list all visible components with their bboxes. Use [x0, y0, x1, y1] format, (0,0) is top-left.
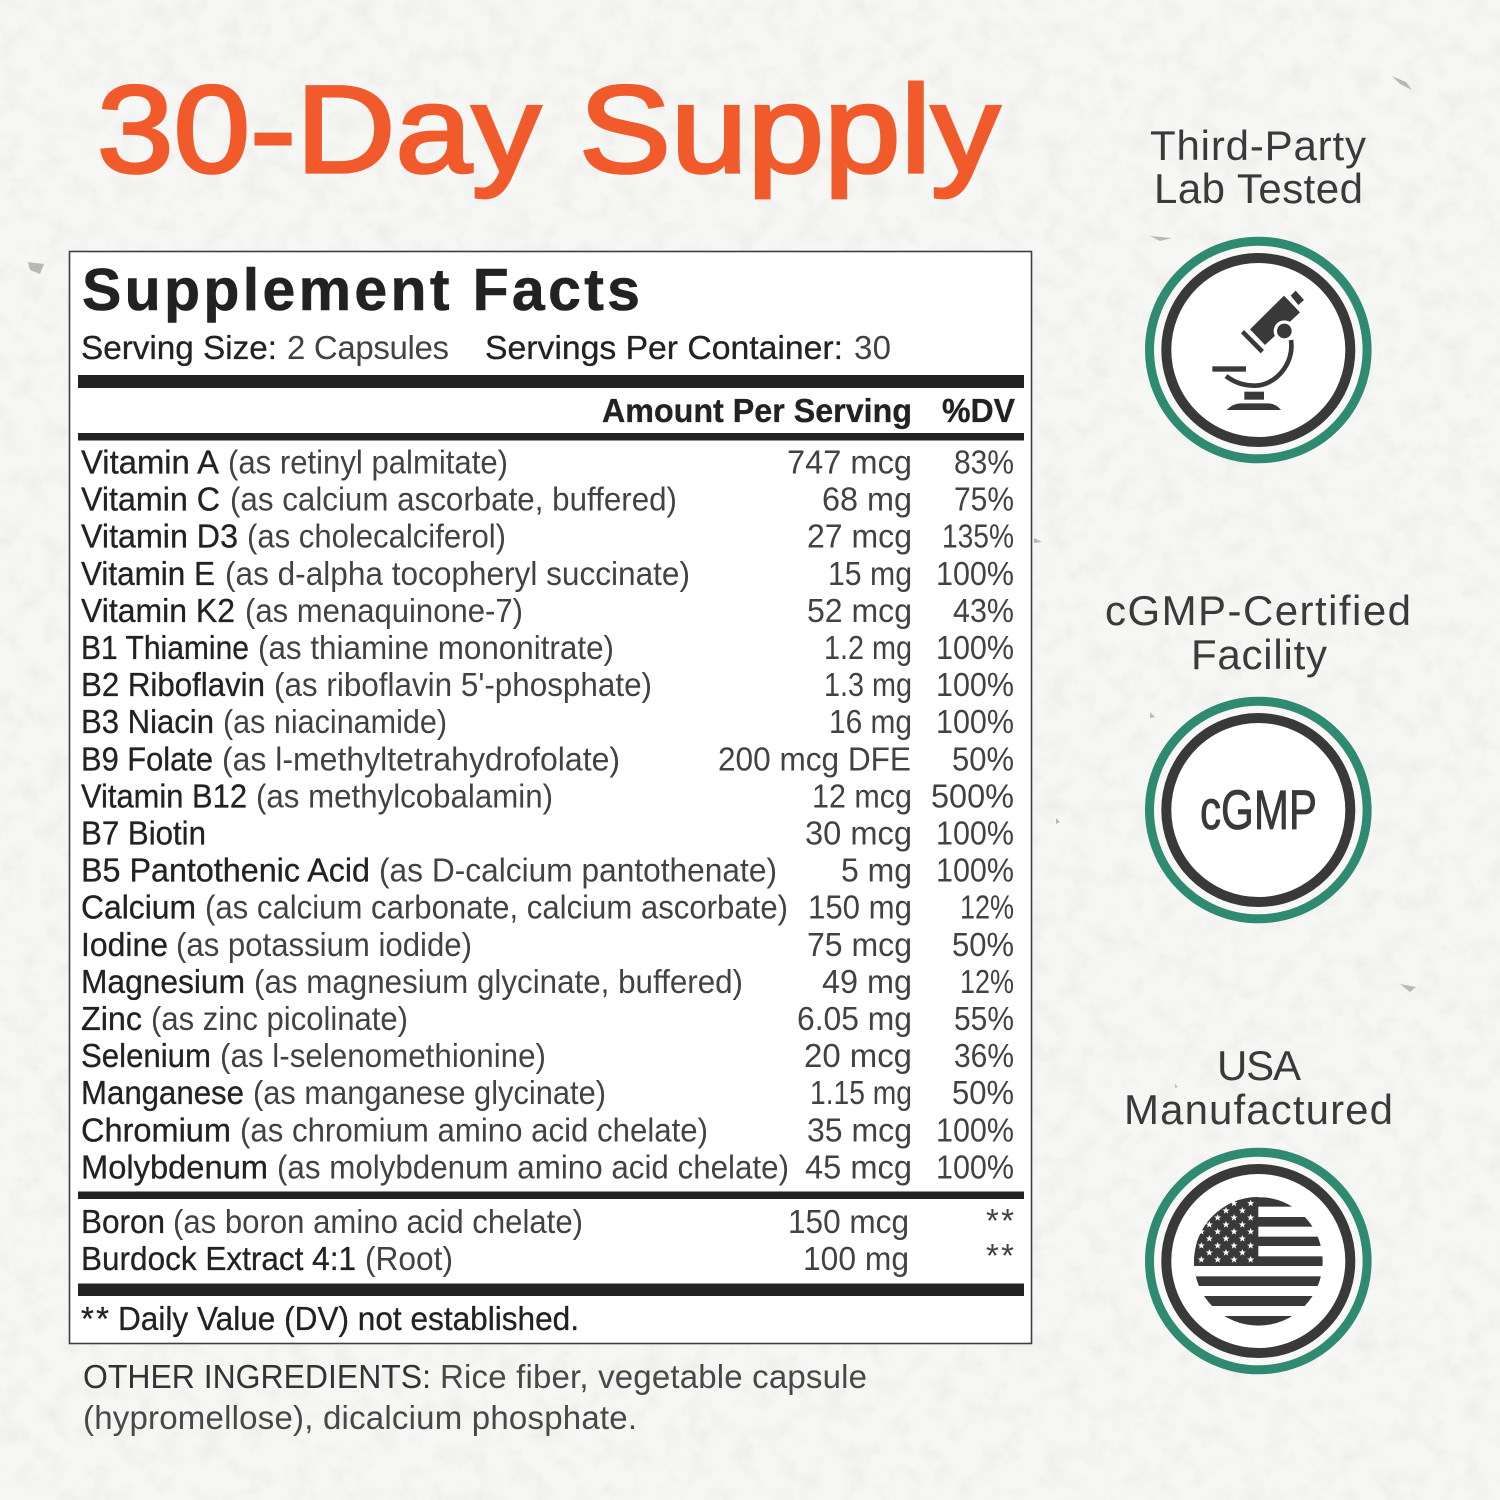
- row: Vitamin B12: Vitamin B12: [81, 777, 247, 814]
- row: Iodine: Iodine: [81, 926, 168, 963]
- serving information: Serving Size:: [81, 329, 277, 366]
- row: Boron: 150 mcg: [788, 1203, 909, 1240]
- row: B3 Niacin: 100%: [936, 703, 1014, 740]
- footnote: Daily Value (DV) not established.: [118, 1300, 579, 1337]
- row: B9 Folate: (as l-methyltetrahydrofolate): [222, 740, 620, 777]
- row: Vitamin K2: [81, 592, 1014, 629]
- row: B3 Niacin: (as niacinamide): [223, 703, 447, 740]
- row: Manganese: 50%: [952, 1074, 1014, 1111]
- row: Selenium: 20 mcg: [804, 1037, 912, 1074]
- row: Selenium: [81, 1037, 1014, 1074]
- row: Vitamin E: (as d-alpha tocopheryl succinate): [225, 555, 690, 592]
- row: Chromium: [81, 1111, 1014, 1148]
- row: Vitamin C: (as calcium ascorbate, buffered): [230, 481, 677, 518]
- label: third-party lab tested: Lab Tested: [1154, 165, 1363, 212]
- row: B5 Pantothenic Acid: [81, 852, 1014, 889]
- row: Magnesium: 12%: [960, 963, 1014, 1000]
- row: B9 Folate: 50%: [952, 740, 1014, 777]
- label: USA manufactured: USA: [1217, 1042, 1301, 1089]
- row: Vitamin B12: [81, 777, 1014, 814]
- row: Vitamin A: Vitamin A: [81, 444, 219, 480]
- row: Zinc: [81, 1000, 1014, 1037]
- row: Magnesium: 49 mg: [822, 963, 912, 1000]
- title: 30-Day Supply: [97, 61, 1000, 199]
- row: Vitamin K2: (as menaquinone-7): [245, 592, 523, 629]
- row: Vitamin D3: [81, 518, 1014, 555]
- row: B7 Biotin: [81, 814, 1014, 852]
- panel: supplement facts: [70, 252, 1032, 1344]
- row: Calcium: [81, 889, 1014, 926]
- row: Vitamin E: Vitamin E: [81, 555, 215, 592]
- label: cGMP-certified facility: Facility: [1191, 631, 1327, 678]
- column headers: Amount Per Serving: [602, 392, 912, 429]
- row: B9 Folate: 200 mcg DFE: [718, 740, 911, 777]
- row: Molybdenum: [81, 1148, 1014, 1185]
- row: Magnesium: [81, 963, 1014, 1000]
- row: Calcium: 12%: [960, 889, 1014, 926]
- row: Boron: Boron: [81, 1203, 165, 1240]
- row: B2 Riboflavin: (as riboflavin 5'-phosphate): [274, 666, 652, 703]
- row: Molybdenum: Molybdenum: [81, 1148, 268, 1185]
- row: Vitamin C: [81, 481, 1014, 518]
- serving information: 2 Capsules: [287, 329, 449, 366]
- label: third-party lab tested: [1150, 122, 1366, 212]
- row: Iodine: [81, 926, 1014, 963]
- row: Chromium: 100%: [936, 1111, 1014, 1148]
- row: Iodine: 75 mcg: [807, 926, 912, 963]
- row: B2 Riboflavin: [81, 666, 1014, 703]
- row: Molybdenum: 45 mcg: [805, 1148, 912, 1185]
- row: Manganese: (as manganese glycinate): [253, 1074, 606, 1111]
- row: Boron: [81, 1202, 1014, 1240]
- row: Vitamin D3: (as cholecalciferol): [247, 518, 506, 555]
- row: Iodine: 50%: [952, 926, 1014, 963]
- row: Burdock Extract: [81, 1237, 1014, 1277]
- row: Vitamin E: [81, 555, 1014, 592]
- icon: cGMP badge: cGMP: [1200, 778, 1317, 841]
- row: Vitamin C: 75%: [954, 481, 1014, 518]
- row: Burdock Extract: (Root): [365, 1240, 453, 1277]
- row: Vitamin C: 68 mg: [822, 481, 912, 518]
- row: Vitamin A: 747 mcg: [787, 444, 912, 480]
- row: Selenium: 36%: [954, 1037, 1014, 1074]
- row: B5 Pantothenic Acid: 100%: [936, 852, 1014, 889]
- row: Vitamin E: 100%: [936, 555, 1014, 592]
- footnote: **: [81, 1300, 109, 1337]
- row: Vitamin B12: 500%: [931, 777, 1014, 814]
- row: Molybdenum: (as molybdenum amino acid chelate): [277, 1148, 789, 1185]
- row: Manganese: Manganese: [81, 1074, 244, 1111]
- label: cGMP-certified facility: [1105, 587, 1411, 678]
- row: Magnesium: Magnesium: [81, 963, 245, 1000]
- row: Iodine: (as potassium iodide): [176, 926, 472, 963]
- row: B7 Biotin: 30 mcg: [805, 814, 912, 852]
- row: Zinc: 6.05 mg: [797, 1000, 912, 1037]
- row: Vitamin B12: (as methylcobalamin): [256, 777, 553, 814]
- row: Zinc: (as zinc picolinate): [151, 1000, 408, 1037]
- row: Chromium: 35 mcg: [807, 1111, 912, 1148]
- row: Molybdenum: 100%: [936, 1148, 1014, 1185]
- row: Vitamin A: [81, 444, 1014, 480]
- row: B5 Pantothenic Acid: (as D-calcium pantothenate): [379, 852, 777, 889]
- row: Vitamin K2: Vitamin K2: [81, 592, 235, 629]
- row: Vitamin D3: 27 mcg: [807, 518, 912, 555]
- other ingredients: Rice fiber, vegetable capsule: [440, 1358, 867, 1395]
- label: USA manufactured: Manufactured: [1124, 1086, 1393, 1133]
- icon: cGMP badge: [1150, 701, 1367, 919]
- icon: microscope badge: [1150, 241, 1367, 459]
- row: Vitamin B12: 12 mcg: [812, 777, 912, 814]
- row: Chromium: Chromium: [81, 1111, 231, 1148]
- row: B3 Niacin: B3 Niacin: [81, 703, 214, 740]
- row: B3 Niacin: [81, 703, 1014, 740]
- other ingredients: (hypromellose), dicalcium phosphate.: [83, 1399, 637, 1436]
- column headers: %DV: [942, 392, 1015, 429]
- other ingredients: [83, 1358, 867, 1436]
- row: B2 Riboflavin: 100%: [936, 666, 1014, 703]
- label: USA manufactured: [1124, 1042, 1393, 1133]
- row: B2 Riboflavin: B2 Riboflavin: [81, 666, 265, 703]
- row: Vitamin A: 83%: [954, 444, 1014, 480]
- row: Vitamin K2: 43%: [953, 592, 1014, 629]
- row: B1 Thiamine: 1.2 mg: [824, 629, 912, 666]
- row: Selenium: Selenium: [81, 1037, 211, 1074]
- row: B1 Thiamine: B1 Thiamine: [81, 629, 249, 666]
- label: third-party lab tested: Third-Party: [1150, 122, 1366, 169]
- row: B1 Thiamine: 100%: [936, 629, 1014, 666]
- row: Selenium: (as l-selenomethionine): [220, 1037, 546, 1074]
- row: Burdock Extract: Burdock Extract 4:1: [81, 1240, 356, 1277]
- row: Vitamin D3: Vitamin D3: [81, 518, 238, 555]
- row: Boron: (as boron amino acid chelate): [173, 1203, 583, 1240]
- row: Burdock Extract: 100 mg: [803, 1240, 909, 1277]
- row: B5 Pantothenic Acid: B5 Pantothenic Acid: [81, 852, 370, 889]
- row: B1 Thiamine: (as thiamine mononitrate): [258, 629, 614, 666]
- row: B3 Niacin: 16 mg: [829, 703, 912, 740]
- row: Calcium: Calcium: [81, 889, 196, 926]
- row: Vitamin A: (as retinyl palmitate): [228, 444, 508, 480]
- row: Vitamin E: 15 mg: [828, 555, 912, 592]
- heading: supplement facts: Supplement Facts: [82, 257, 640, 323]
- row: Vitamin C: Vitamin C: [81, 481, 220, 518]
- row: B5 Pantothenic Acid: 5 mg: [841, 852, 912, 889]
- row: Chromium: (as chromium amino acid chelate): [240, 1111, 708, 1148]
- row: Magnesium: (as magnesium glycinate, buffered): [254, 963, 743, 1000]
- row: Manganese: 1.15 mg: [810, 1074, 912, 1111]
- row: Zinc: 55%: [954, 1000, 1014, 1037]
- row: B9 Folate: B9 Folate: [81, 740, 213, 777]
- row: Vitamin D3: 135%: [942, 518, 1014, 555]
- row: Calcium: (as calcium carbonate, calcium ascorbate): [205, 889, 788, 926]
- row: Manganese: [81, 1074, 1014, 1111]
- row: B7 Biotin: B7 Biotin: [81, 814, 206, 852]
- serving information: 30: [854, 329, 891, 366]
- row: Zinc: Zinc: [81, 1000, 142, 1037]
- other ingredients: OTHER INGREDIENTS:: [83, 1358, 431, 1395]
- row: B9 Folate: [81, 740, 1014, 777]
- row: Calcium: 150 mg: [808, 889, 912, 926]
- row: Vitamin K2: 52 mcg: [807, 592, 912, 629]
- row: Boron: **: [986, 1202, 1014, 1239]
- label: cGMP-certified facility: cGMP-Certified: [1105, 587, 1411, 634]
- row: B7 Biotin: 100%: [936, 814, 1014, 852]
- icon: USA flag badge: [1150, 1152, 1367, 1370]
- row: B2 Riboflavin: 1.3 mg: [824, 666, 912, 703]
- row: Burdock Extract: **: [986, 1237, 1014, 1274]
- row: B1 Thiamine: [81, 629, 1014, 666]
- serving information: [81, 329, 891, 366]
- serving information: Servings Per Container:: [485, 329, 843, 366]
